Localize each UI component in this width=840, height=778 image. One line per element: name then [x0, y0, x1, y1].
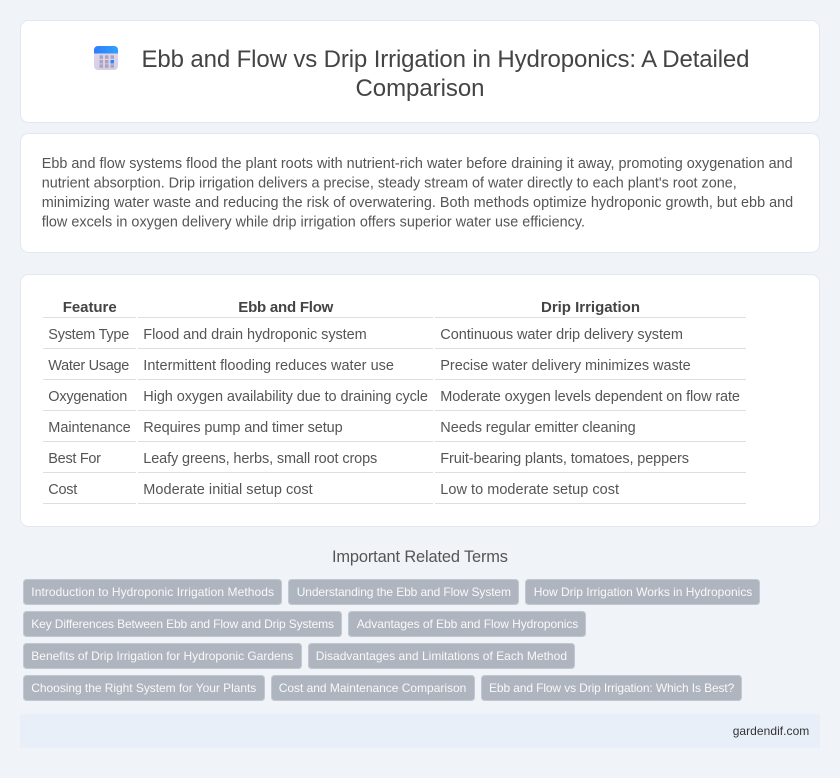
row: best for: Leafy greens, herbs, small root crops: [143, 451, 377, 467]
row: cost: Low to moderate setup cost: [440, 482, 619, 498]
panel: intro paragraph: [20, 134, 820, 252]
row: oxygenation: [48, 389, 740, 405]
tag: Advantages of Ebb and Flow Hydroponics: [357, 617, 578, 631]
tag: [308, 644, 574, 668]
row: water usage: [48, 358, 691, 374]
tag: [348, 612, 586, 636]
text block: intro: flow excels in oxygen delivery while drip irrigation offers superior water use efficiency.: [42, 214, 585, 230]
tag: Understanding the Ebb and Flow System: [297, 585, 511, 599]
row: system type: [48, 327, 683, 343]
row: maintenance: Needs regular emitter cleaning: [440, 420, 636, 436]
row: water usage: Intermittent flooding reduces water use: [143, 358, 394, 374]
tag list: related terms: [24, 580, 760, 700]
tag: [288, 580, 518, 604]
row: system type: Continuous water drip delivery system: [440, 327, 683, 343]
heading: important related terms: Important Related Terms: [332, 548, 508, 566]
tag: Benefits of Drip Irrigation for Hydroponic Gardens: [31, 649, 293, 663]
row: maintenance: Requires pump and timer setup: [143, 420, 343, 436]
row: cost: Cost: [48, 482, 77, 498]
row: oxygenation: Oxygenation: [48, 389, 127, 405]
icon: calendar: [94, 46, 118, 70]
title: [142, 46, 750, 102]
row: cost: Moderate initial setup cost: [143, 482, 313, 498]
tag: How Drip Irrigation Works in Hydroponics: [534, 585, 752, 599]
table header: Feature: [63, 299, 117, 316]
tag: Choosing the Right System for Your Plants: [31, 681, 256, 695]
row: system type: System Type: [48, 327, 129, 343]
row: water usage: Precise water delivery minimizes waste: [440, 358, 691, 374]
table header: [63, 299, 640, 316]
row: oxygenation: Moderate oxygen levels dependent on flow rate: [440, 389, 740, 405]
title: Comparison: [356, 75, 484, 102]
text block: intro: minimizing water waste and reducing the risk of overwatering. Both methods optimize hydroponic growth, but ebb and: [42, 195, 793, 211]
table header: Ebb and Flow: [238, 299, 334, 316]
footer: gardendif.com: [733, 724, 809, 738]
text block: intro: Ebb and flow systems flood the plant roots with nutrient-rich water before draining it away, promoting oxygenation and: [42, 156, 793, 172]
tag: [24, 676, 264, 700]
tag: [24, 644, 302, 668]
tag: [24, 612, 342, 636]
text block: intro: nutrient absorption. Drip irrigation delivers a precise, steady stream of water directly to each plant's root zone,: [42, 176, 737, 192]
panel: comparison table: [20, 274, 820, 526]
panel: header: [20, 20, 820, 122]
table header: Drip Irrigation: [541, 299, 640, 316]
tag: Introduction to Hydroponic Irrigation Methods: [31, 585, 274, 599]
tag: Disadvantages and Limitations of Each Method: [316, 649, 567, 663]
row: system type: Flood and drain hydroponic system: [143, 327, 367, 343]
row: best for: Best For: [48, 451, 101, 467]
tag: [272, 676, 474, 700]
row: cost: [48, 482, 619, 498]
row: maintenance: [48, 420, 636, 436]
row: maintenance: Maintenance: [48, 420, 131, 436]
tag: Ebb and Flow vs Drip Irrigation: Which Is Best?: [489, 681, 735, 695]
tag: [24, 580, 282, 604]
row: best for: Fruit-bearing plants, tomatoes, peppers: [440, 451, 689, 467]
tag: Cost and Maintenance Comparison: [279, 681, 466, 695]
text block: intro: [42, 156, 793, 230]
footer: [20, 714, 820, 748]
row: oxygenation: High oxygen availability due to draining cycle: [143, 389, 428, 405]
tag: [482, 676, 742, 700]
row: best for: [48, 451, 689, 467]
tag: [526, 580, 760, 604]
row: water usage: Water Usage: [48, 358, 129, 374]
title: Ebb and Flow vs Drip Irrigation in Hydroponics: A Detailed: [142, 46, 750, 73]
tag: Key Differences Between Ebb and Flow and Drip Systems: [31, 617, 334, 631]
